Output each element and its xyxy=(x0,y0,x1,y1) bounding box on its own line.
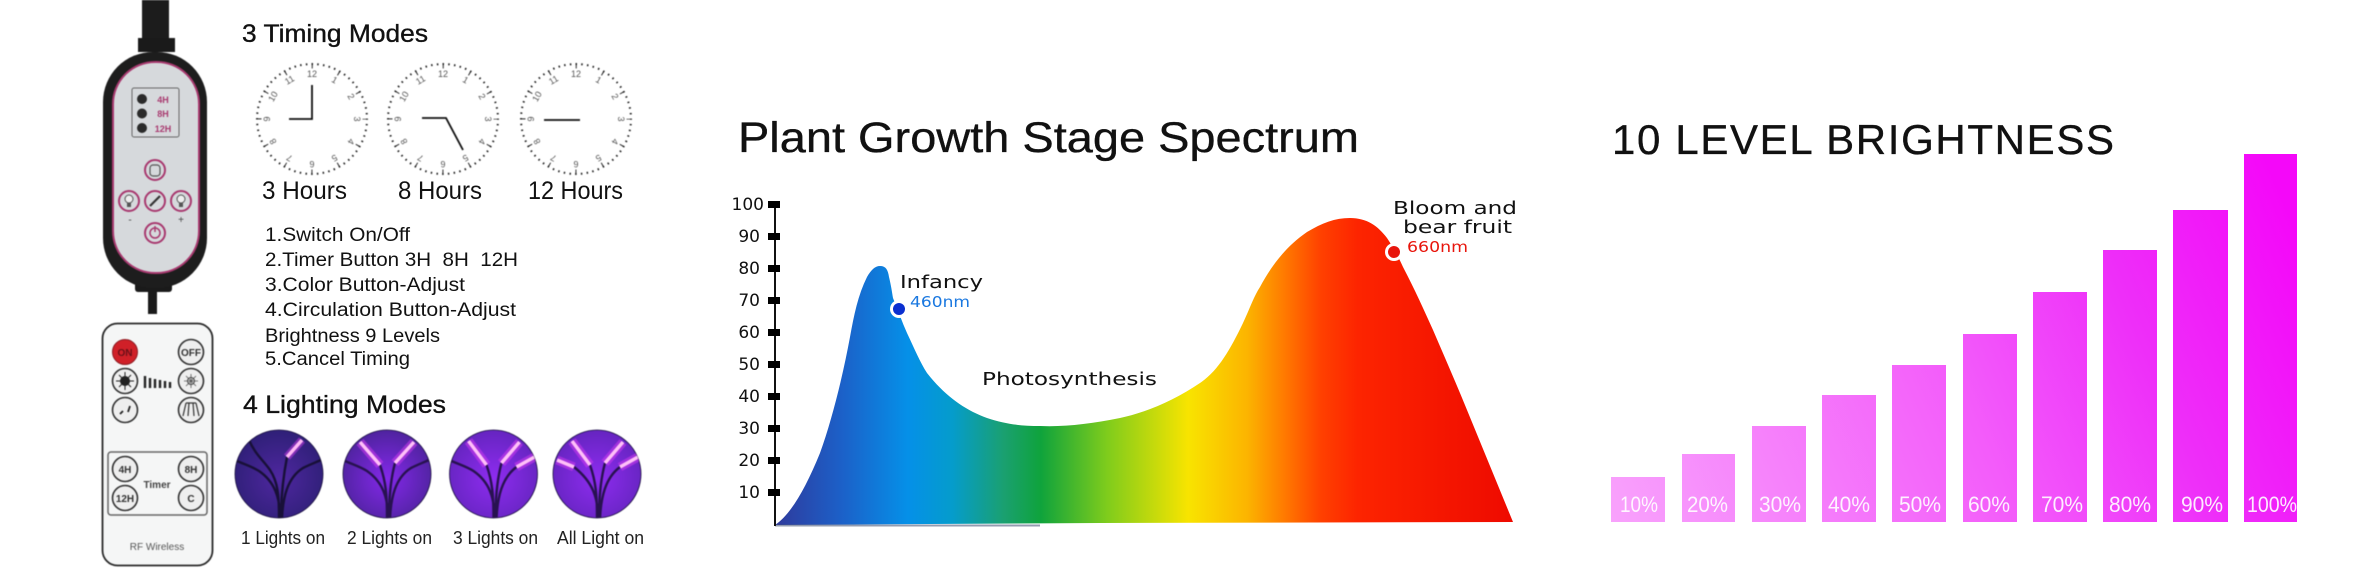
clock: 3 hours xyxy=(257,64,367,174)
bar 100% xyxy=(2244,154,2297,522)
icon: wired controller: 4H xyxy=(157,95,169,105)
heading: 4 Lighting Modes: 4 Lighting Modes xyxy=(243,391,446,419)
clock: 12 hours: 12 xyxy=(571,69,581,79)
y axis with ticks: 60 xyxy=(738,323,760,343)
clock: 12 hours: 2 xyxy=(609,92,621,101)
y axis with ticks: 100 xyxy=(732,195,764,215)
caption: All Light on: All Light on xyxy=(557,528,644,548)
clock: 8 hours: 5 xyxy=(461,152,470,164)
label: Bloom and bear fruit: bear fruit xyxy=(1403,217,1512,238)
bar 60%: 60% xyxy=(1968,492,2010,517)
icon: RF remote: ON xyxy=(118,348,132,359)
baseline shadow xyxy=(775,524,1040,526)
text block: button functions: 2.Timer Button 3H 8H 12H xyxy=(265,250,518,271)
bar 80% xyxy=(2103,250,2157,522)
icon: RF remote xyxy=(102,324,212,566)
clock: 3 hours: 4 xyxy=(345,137,357,146)
clock: 12 hours xyxy=(521,64,631,174)
clock: 8 hours: 6 xyxy=(440,159,446,169)
clock: 12 hours: 6 xyxy=(573,159,579,169)
y axis with ticks: 70 xyxy=(738,291,760,311)
bar 90% xyxy=(2173,210,2228,522)
icon: wired controller: - xyxy=(128,215,132,226)
text block: button functions: Brightness 9 Levels xyxy=(265,326,440,347)
spectrum curve area xyxy=(775,218,1513,525)
caption: 1 Lights on: 1 Lights on xyxy=(241,528,325,548)
y axis with ticks: 40 xyxy=(738,387,760,407)
icon: RF remote: 4H xyxy=(119,465,131,476)
caption: 2 Lights on: 2 Lights on xyxy=(347,528,432,548)
y axis with ticks: 10 xyxy=(738,483,760,503)
clock caption: 3 Hours: 3 Hours xyxy=(262,177,347,205)
heading: 10 LEVEL BRIGHTNESS: 10 LEVEL BRIGHTNESS xyxy=(1612,116,2114,163)
clock: 12 hours: 10 xyxy=(530,90,544,103)
bar 20%: 20% xyxy=(1687,492,1728,517)
clock: 3 hours: 12 xyxy=(307,69,317,79)
clock: 8 hours xyxy=(388,64,498,174)
text block: button functions: 1.Switch On/Off xyxy=(265,225,411,246)
icon: wired controller: 8H xyxy=(157,109,169,119)
text block: button functions xyxy=(265,225,518,370)
chart: plant growth spectrum xyxy=(732,195,1517,526)
clock: 12 hours: 8 xyxy=(531,137,543,146)
text block: button functions: 4.Circulation Button-Adjust xyxy=(265,300,517,321)
text block: button functions: 5.Cancel Timing xyxy=(265,349,410,370)
bar 40%: 40% xyxy=(1828,492,1870,517)
icon: RF remote: RF Wireless xyxy=(130,542,184,553)
label: Bloom and bear fruit: Bloom and xyxy=(1393,198,1517,219)
caption: 3 Lights on: 3 Lights on xyxy=(453,528,538,548)
bar 100%: 100% xyxy=(2247,492,2297,517)
clock caption: 8 Hours: 8 Hours xyxy=(398,177,482,205)
bar 90%: 90% xyxy=(2181,492,2223,517)
y axis with ticks: 90 xyxy=(738,227,760,247)
clock: 12 hours: 4 xyxy=(609,137,621,146)
marker: 460nm xyxy=(890,300,908,318)
clock: 12 hours: 3 xyxy=(616,116,626,122)
bar 50% xyxy=(1892,365,1946,522)
lighting mode: 3 lights on xyxy=(450,430,538,518)
y axis with ticks: 20 xyxy=(738,451,760,471)
y axis with ticks: 80 xyxy=(738,259,760,279)
lighting mode: all lights on xyxy=(553,430,641,518)
y axis with ticks xyxy=(732,195,780,526)
bar 20% xyxy=(1682,454,1735,522)
clock: 8 hours: 8 xyxy=(398,137,410,146)
clock: 3 hours: 6 xyxy=(309,159,315,169)
y axis with ticks: 30 xyxy=(738,419,760,439)
bar 70% xyxy=(2033,292,2087,522)
clock: 8 hours: 9 xyxy=(393,116,403,122)
clock: 8 hours: 12 xyxy=(438,69,448,79)
bar chart: brightness levels xyxy=(1611,154,2297,522)
icon: RF remote: Timer xyxy=(143,480,171,491)
text block: button functions: 3.Color Button-Adjust xyxy=(265,275,466,296)
bar 70%: 70% xyxy=(2041,492,2083,517)
clock: 8 hours: 2 xyxy=(476,92,488,101)
clock: 3 hours: 5 xyxy=(330,152,339,164)
label: Photosynthesis: Photosynthesis xyxy=(982,369,1157,390)
clock: 12 hours: 9 xyxy=(526,116,536,122)
bar 40% xyxy=(1822,395,1876,522)
clock: 12 hours: 7 xyxy=(549,152,558,164)
heading: 3 Timing Modes: 3 Timing Modes xyxy=(242,20,428,48)
icon: RF remote: 8H xyxy=(185,465,197,476)
clock: 3 hours: 11 xyxy=(283,73,296,87)
clock: 3 hours: 2 xyxy=(345,92,357,101)
clock: 3 hours: 7 xyxy=(285,152,294,164)
bar 30% xyxy=(1752,426,1806,522)
clock: 8 hours: 4 xyxy=(476,137,488,146)
clock: 8 hours: 11 xyxy=(414,73,427,87)
clock: 3 hours: 1 xyxy=(330,74,339,86)
label: Infancy: Infancy xyxy=(900,272,983,293)
label: Bloom and bear fruit xyxy=(1393,198,1517,238)
icon: RF remote: C xyxy=(187,494,195,505)
clock: 8 hours: 7 xyxy=(416,152,425,164)
icon: wired controller: + xyxy=(178,215,184,226)
clock: 3 hours: 9 xyxy=(262,116,272,122)
icon: RF remote: OFF xyxy=(181,348,201,359)
bar 30%: 30% xyxy=(1759,492,1801,517)
icon: wired controller: 12H xyxy=(155,124,171,134)
clock: 3 hours: 8 xyxy=(267,137,279,146)
bar 80%: 80% xyxy=(2109,492,2151,517)
clock: 8 hours: 10 xyxy=(397,90,411,103)
lighting mode: 1 light on xyxy=(235,430,323,518)
bar 10%: 10% xyxy=(1620,492,1658,517)
bar 60% xyxy=(1963,334,2017,522)
icon: RF remote: 12H xyxy=(116,494,134,505)
label: 460nm: 460nm xyxy=(910,293,970,311)
clock: 8 hours: 1 xyxy=(461,74,470,86)
label: 660nm: 660nm xyxy=(1407,238,1468,256)
clock: 12 hours: 11 xyxy=(547,73,560,87)
clock: 8 hours: 3 xyxy=(483,116,493,122)
y axis with ticks: 50 xyxy=(738,355,760,375)
clock caption: 12 Hours: 12 Hours xyxy=(528,177,623,205)
bar 50%: 50% xyxy=(1899,492,1941,517)
marker: 660nm xyxy=(1385,243,1403,261)
clock: 12 hours: 1 xyxy=(594,74,603,86)
clock: 12 hours: 5 xyxy=(594,152,603,164)
lighting mode: 2 lights on xyxy=(343,430,431,518)
bar 10% xyxy=(1611,477,1665,522)
heading: Plant Growth Stage Spectrum: Plant Growth Stage Spectrum xyxy=(738,114,1359,162)
icon: wired controller xyxy=(103,0,207,314)
clock: 3 hours: 3 xyxy=(352,116,362,122)
clock: 3 hours: 10 xyxy=(266,90,280,103)
